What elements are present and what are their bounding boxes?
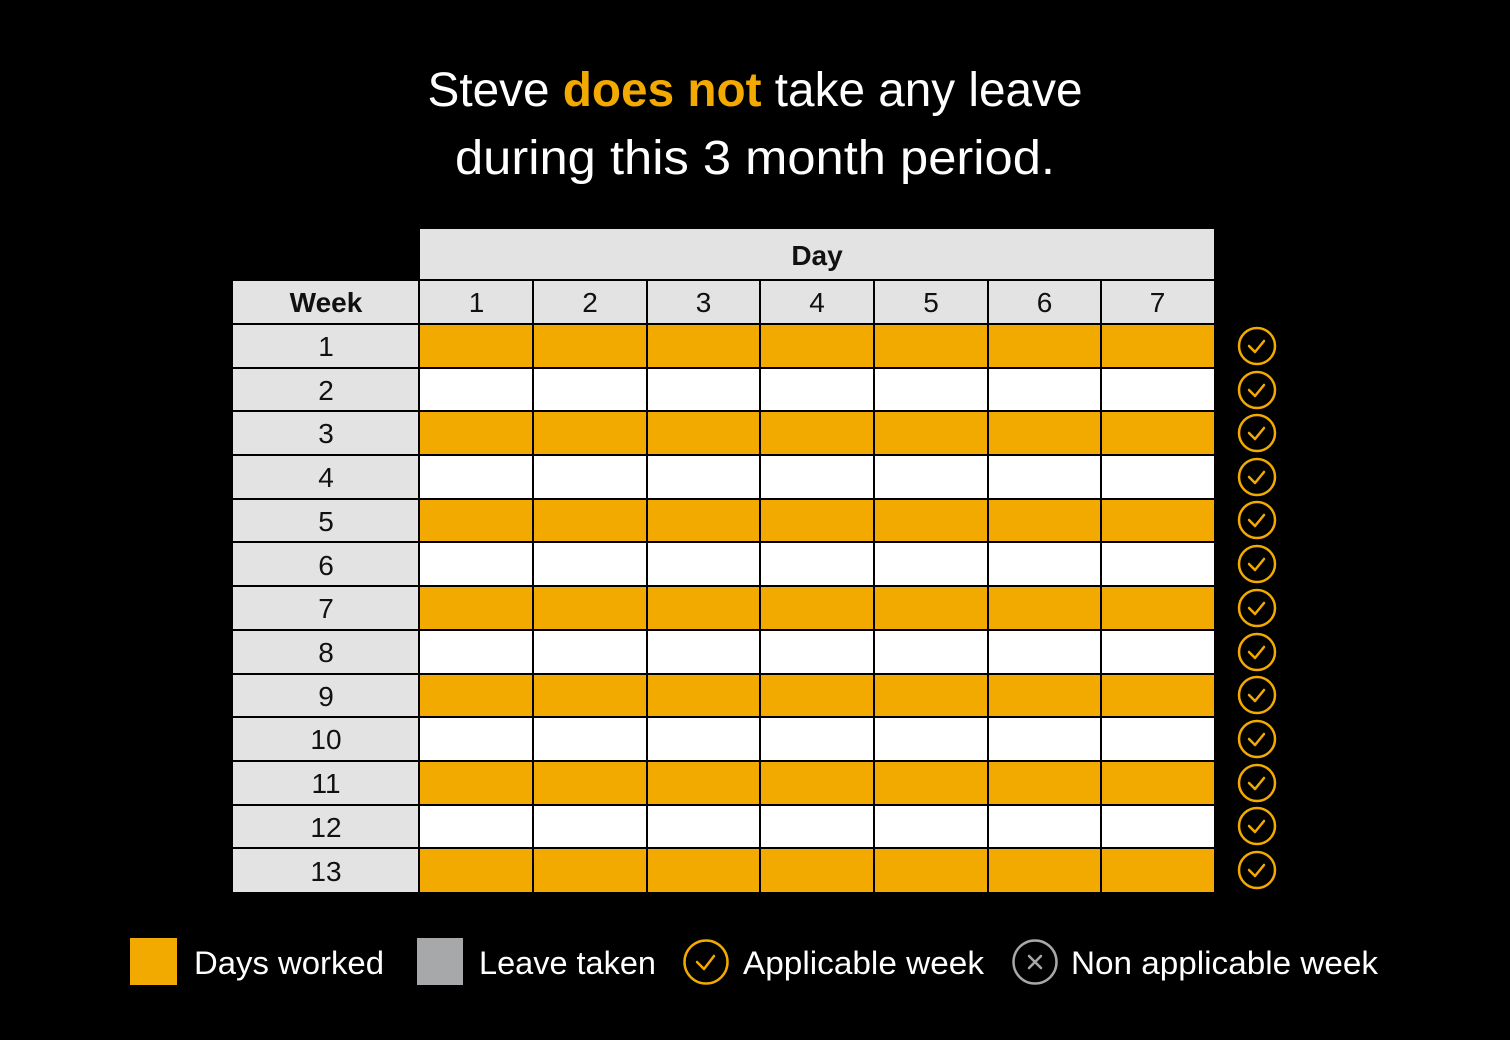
rows: weeks 1-13: [233, 324, 1214, 892]
header row: Week and day numbers: 2: [582, 287, 598, 318]
rows: weeks 1-13: 12: [310, 812, 342, 843]
rows: weeks 1-13: 3: [318, 418, 334, 449]
header: Day: Day: [791, 240, 843, 271]
title: Steve does not take any leave: [428, 64, 1082, 117]
legend: leave taken: Leave taken: [479, 945, 656, 981]
title: during this 3 month period.: [455, 132, 1055, 185]
rows: weeks 1-13: 11: [311, 768, 341, 799]
legend: applicable week: Applicable week: [743, 945, 985, 981]
legend: [130, 938, 1379, 985]
header row: Week and day numbers: Week: [290, 287, 363, 318]
legend: non applicable week: Non applicable week: [1071, 945, 1379, 981]
rows: weeks 1-13: 1: [318, 331, 334, 362]
rows: weeks 1-13: 7: [318, 593, 334, 624]
rows: weeks 1-13: 9: [318, 681, 334, 712]
legend: non applicable week: [1014, 940, 1379, 984]
rows: weeks 1-13: 4: [318, 462, 334, 493]
table: [233, 229, 1214, 892]
rows: weeks 1-13: 8: [318, 637, 334, 668]
rows: weeks 1-13: 10: [310, 724, 342, 755]
header row: Week and day numbers: 7: [1150, 287, 1165, 318]
rows: weeks 1-13: 13: [310, 856, 342, 887]
header row: Week and day numbers: [233, 280, 1214, 324]
header row: Week and day numbers: 1: [469, 287, 484, 318]
header row: Week and day numbers: 6: [1037, 287, 1052, 318]
legend: leave taken: [417, 938, 656, 985]
rows: weeks 1-13: 2: [318, 375, 334, 406]
header row: Week and day numbers: 5: [923, 287, 939, 318]
legend: days worked: [130, 938, 384, 985]
header row: Week and day numbers: 3: [696, 287, 711, 318]
rows: weeks 1-13: 6: [318, 550, 334, 581]
icons: applicable week checks: [1239, 328, 1275, 888]
rows: weeks 1-13: 5: [318, 506, 334, 537]
header: Day: [420, 229, 1214, 279]
header row: Week and day numbers: 4: [809, 287, 825, 318]
legend: days worked: Days worked: [194, 945, 384, 981]
title: [428, 64, 1082, 185]
legend: applicable week: [684, 940, 985, 984]
